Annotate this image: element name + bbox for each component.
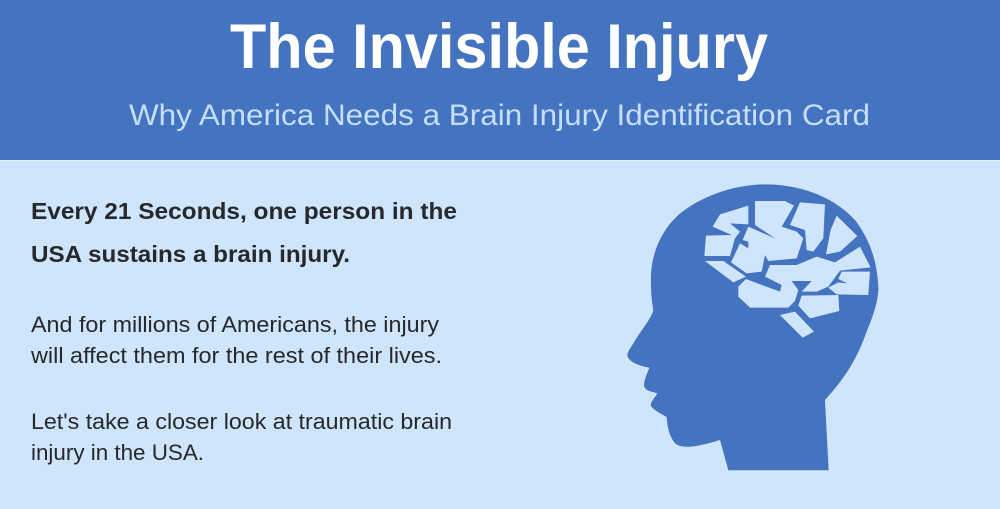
paragraph: lifelong effect: And for millions of Americans, the injury [31, 312, 439, 337]
title: The Invisible Injury [230, 12, 768, 82]
paragraph: lifelong effect: will affect them for the rest of their lives. [30, 343, 442, 368]
bold statement: USA sustains a brain injury. [31, 241, 350, 267]
paragraph: closer look: Let's take a closer look at traumatic brain [31, 409, 452, 434]
subtitle: Why America Needs a Brain Injury Identification Card [129, 99, 870, 132]
header banner [0, 0, 1000, 161]
bold statement [31, 198, 457, 267]
paragraph: closer look [31, 409, 452, 465]
head silhouette [627, 184, 878, 470]
intro text block [30, 198, 457, 465]
brain fragments [704, 201, 871, 338]
paragraph: lifelong effect [30, 312, 442, 368]
icon: head silhouette with fractured brain [627, 184, 878, 470]
paragraph: closer look: injury in the USA. [31, 440, 204, 465]
bold statement: Every 21 Seconds, one person in the [31, 198, 457, 224]
